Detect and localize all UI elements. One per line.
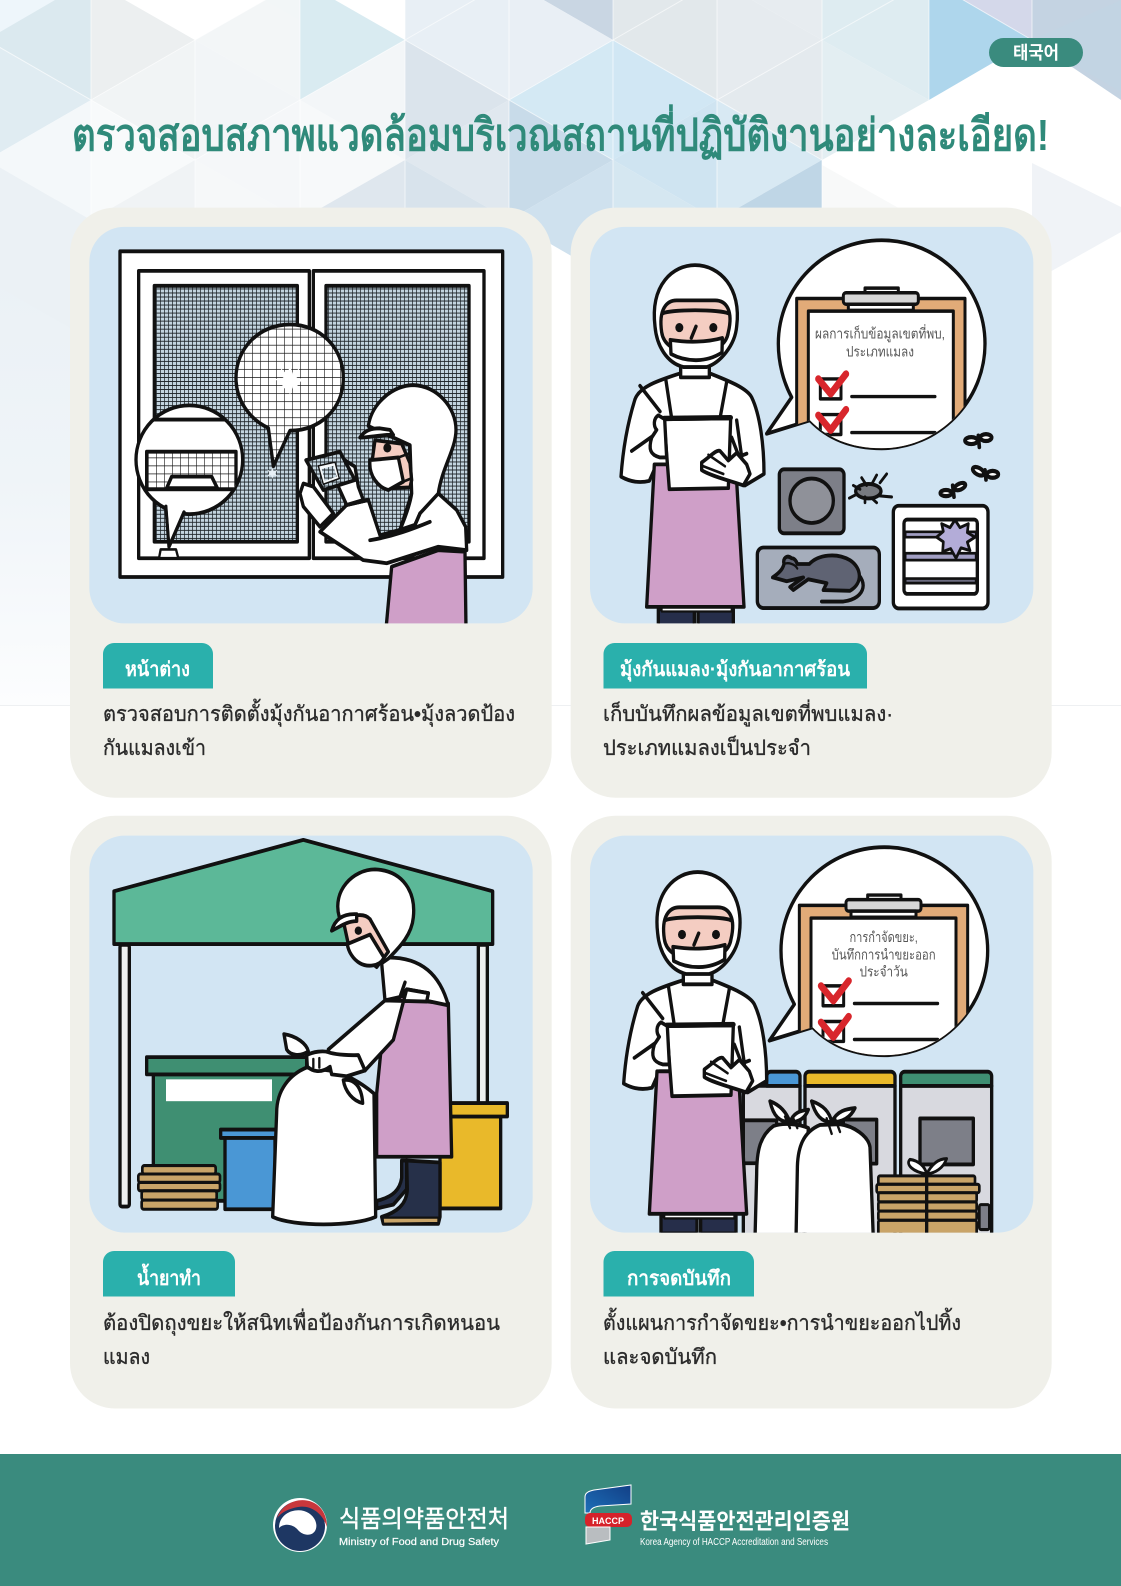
- tab label: waste bags: น้ำยาทำ: [137, 1263, 201, 1290]
- tab: insect screen: [604, 643, 867, 688]
- panel: recording: [571, 816, 1052, 1408]
- panel: insect screen: [571, 208, 1052, 798]
- illustration: worker recording waste disposal: [624, 847, 992, 1239]
- illustration: worker recording waste disposal: ประจำวัน: [859, 964, 908, 980]
- footer: [0, 1454, 1121, 1586]
- description: recording: [603, 1308, 961, 1369]
- description: window: [103, 699, 515, 760]
- description: window: ตรวจสอบการติดตั้งมุ้งกันอากาศร้อน•มุ้งลวดป้อง: [103, 699, 515, 727]
- description: waste bags: ต้องปิดถุงขยะให้สนิทเพื่อป้องกันการเกิดหนอน: [103, 1308, 500, 1336]
- panel: window: [70, 208, 552, 798]
- text: Ministry name: [339, 1506, 509, 1548]
- illustration: worker recording pests: ผลการเก็บข้อมูลเขตที่พบ,: [815, 324, 945, 343]
- text: Korea Agency name: [640, 1509, 850, 1548]
- tab: recording: [604, 1251, 754, 1296]
- illustration: window and worker checking screen: [120, 251, 503, 629]
- illustration: worker recording pests: [621, 240, 998, 626]
- description: window: กันแมลงเข้า: [103, 737, 206, 760]
- description: recording: และจดบันทึก: [603, 1346, 717, 1369]
- logo: HACCP mark: [585, 1485, 632, 1544]
- description: insect screen: [603, 699, 893, 760]
- illustration: worker recording waste disposal: การกำจัดขยะ,: [849, 929, 918, 945]
- tab label: recording: การจดบันทึก: [627, 1268, 731, 1290]
- text: Korea Agency name: 한국식품안전관리인증원: [640, 1509, 850, 1534]
- description: insect screen: ประเภทแมลงเป็นประจำ: [603, 734, 811, 760]
- illustration: worker recording pests: ประเภทแมลง: [846, 344, 914, 360]
- logo: Ministry of Food and Drug Safety emblem: [273, 1498, 327, 1552]
- description: waste bags: [103, 1308, 500, 1369]
- illustration: worker recording waste disposal: บันทึกการนำขยะออก: [832, 947, 936, 963]
- text: Ministry name: 식품의약품안전처: [339, 1506, 509, 1533]
- panel: waste bags: [70, 816, 552, 1408]
- logo: HACCP mark: HACCP: [592, 1516, 624, 1526]
- tab label: insect screen: มุ้งกันแมลง·มุ้งกันอากาศร้อน: [620, 658, 850, 682]
- text: Ministry name: Ministry of Food and Drug Safety: [339, 1537, 499, 1548]
- tab: waste bags: [103, 1251, 235, 1296]
- language tag: [989, 38, 1083, 67]
- tab: window: [103, 643, 213, 688]
- text: Korea Agency name: Korea Agency of HACCP Accreditation and Services: [640, 1537, 828, 1548]
- illustration: worker tying waste bag under tent: [114, 840, 507, 1224]
- tab label: window: หน้าต่าง: [125, 658, 190, 681]
- language tag: 태국어: [1013, 43, 1059, 63]
- description: insect screen: เก็บบันทึกผลข้อมูลเขตที่พบแมลง·: [603, 699, 893, 727]
- description: recording: ตั้งแผนการกำจัดขยะ•การนำขยะออกไปทิ้ง: [603, 1308, 961, 1335]
- background: low-poly pattern: [0, 0, 1121, 706]
- description: waste bags: แมลง: [103, 1346, 150, 1369]
